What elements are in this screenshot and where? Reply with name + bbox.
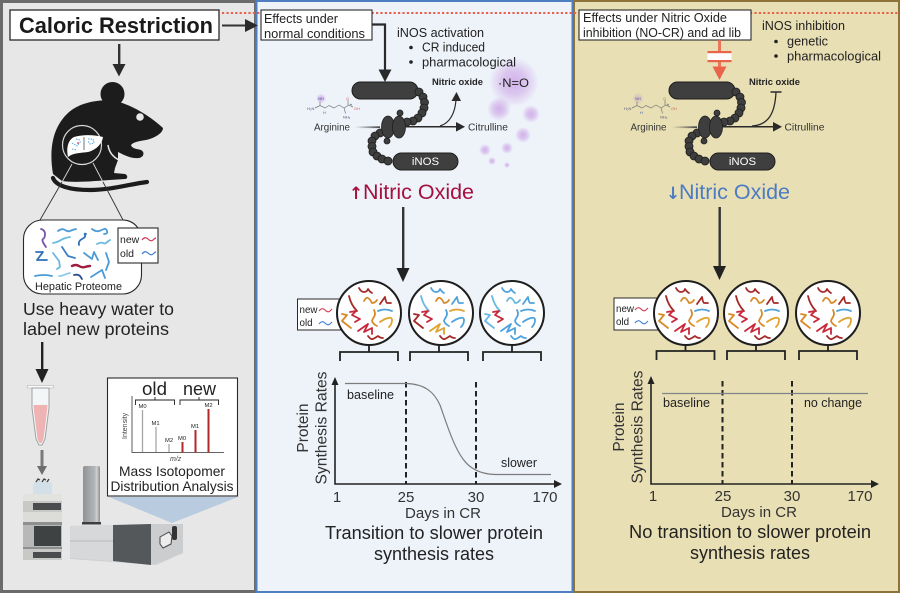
chart: protein synthesis no change: 170 [847, 488, 873, 505]
text: no transition caption: synthesis rates [690, 543, 810, 563]
icon: protein pool day 1 to 25 [337, 281, 401, 345]
arrow: label to tube [36, 342, 48, 383]
legend: new and old proteins: old [120, 248, 134, 260]
label box: effects under nitric oxide inhibition: inhibition (NO-CR) and ad lib [583, 25, 741, 40]
text: iNOS activation list [397, 25, 516, 70]
arrow: normal conditions to iNOS [372, 24, 392, 82]
divider: red dotted inhibition line [222, 12, 899, 14]
icon: liver [67, 135, 103, 157]
label box: effects under nitric oxide inhibition: Effects under Nitric Oxide [583, 10, 727, 25]
icon: iNOS enzyme normal [352, 82, 458, 170]
label box: effects under normal conditions: Effects under [264, 11, 339, 26]
chart: protein synthesis no change: baseline [663, 396, 710, 410]
icon: arginine molecule inhibited: OH [671, 106, 677, 111]
panel: effects under nitric oxide inhibition [574, 1, 899, 592]
legend: new and old proteins: new [120, 234, 140, 246]
text: iNOS inhibition list: genetic [787, 34, 829, 48]
text: transition caption: synthesis rates [374, 544, 494, 564]
arrow: blocked red arrow [708, 40, 732, 80]
arrow: citrulline and nitric oxide [405, 92, 465, 132]
chart: protein synthesis no change: Protein [611, 402, 628, 452]
text: no transition caption: No transition to slower protein [629, 522, 871, 542]
icon: arginine molecule inhibited [624, 92, 677, 120]
chart: protein synthesis transition: 30 [468, 489, 484, 506]
panel: mass isotopomer distribution analysis: M1 [152, 421, 160, 427]
chart: protein synthesis no change: 25 [715, 488, 731, 505]
chart: protein synthesis transition: Synthesis Rates [314, 371, 330, 484]
text: use heavy water: Use heavy water to [23, 299, 174, 319]
panel: mass isotopomer distribution analysis [108, 378, 238, 496]
icon: arginine molecule: H [323, 110, 326, 115]
panel: effects under normal conditions [256, 1, 572, 592]
icon: mouse with liver [51, 82, 163, 190]
text: transition caption [325, 523, 543, 564]
text: iNOS activation list: CR induced [422, 40, 485, 54]
chart: protein synthesis transition: baseline [347, 388, 394, 402]
text: citrulline: Citrulline [468, 122, 508, 134]
legend: new and old inhibited: old [616, 317, 629, 328]
arrow: nitric oxide to proteins [396, 207, 410, 282]
arrow: citrulline with inhibited nitric oxide [722, 92, 782, 132]
chart: protein synthesis transition: 25 [398, 489, 414, 506]
heading: increased nitric oxide: Nitric Oxide [363, 181, 474, 204]
title: Caloric Restriction: Caloric Restriction [19, 13, 213, 38]
icon: protein pool day 30 to 170 [480, 281, 544, 345]
text: arginine label inhibited: Arginine [630, 122, 667, 134]
text: transition caption: Transition to slower protein [325, 523, 543, 543]
label box: effects under nitric oxide inhibition [579, 10, 751, 40]
brackets: inhibited time windows [656, 345, 857, 360]
icon: arginine molecule: NH [318, 96, 324, 101]
icon: liquid chromatography stack [23, 479, 62, 560]
label box: effects under normal conditions [261, 10, 372, 41]
panel: mass isotopomer distribution analysis: M0 [178, 436, 186, 442]
panel: mass isotopomer distribution analysis: new [183, 378, 217, 399]
heading: increased nitric oxide: ↑ [349, 184, 363, 204]
icon: iNOS enzyme inhibited: iNOS [729, 156, 757, 168]
chart: protein synthesis no change: 30 [784, 488, 800, 505]
icon: iNOS enzyme inhibited [669, 82, 775, 170]
label box: effects under normal conditions: normal conditions [264, 26, 365, 41]
text: no transition caption [629, 522, 871, 563]
text: N=O formula: ·N=O [498, 76, 529, 90]
chart: purple nitric oxide glow [479, 57, 540, 168]
panel: caloric restriction workflow [2, 2, 256, 592]
panel: mass isotopomer distribution analysis: m/z [170, 456, 182, 463]
panel: mass isotopomer distribution analysis: Distribution Analysis [110, 478, 234, 494]
text: nitric oxide label: Nitric oxide [432, 77, 483, 87]
chart: protein synthesis no change: Days in CR [721, 504, 797, 521]
legend: new and old normal: old [300, 318, 313, 329]
callout: hepatic proteome zoom lines [40, 163, 123, 220]
legend: new and old normal: new [300, 305, 318, 316]
panel: hepatic proteome [24, 220, 142, 294]
chart: protein synthesis no change [611, 370, 879, 521]
icon: arginine molecule [307, 94, 360, 120]
text: iNOS inhibition list: pharmacological [787, 48, 881, 64]
icon: arginine molecule: NH₂ [343, 114, 351, 120]
brackets: normal time windows [340, 345, 541, 361]
icon: iNOS enzyme normal: iNOS [412, 156, 440, 168]
chart: protein synthesis transition: slower [501, 456, 537, 470]
icon: arginine molecule inhibited: NH [635, 96, 641, 101]
panel: mass isotopomer distribution analysis: M2 [204, 403, 213, 409]
heading: decreased nitric oxide: ↓ [666, 184, 680, 204]
panel: mass isotopomer distribution analysis: Mass Isotopomer [119, 463, 225, 479]
text: citrulline inhibited: Citrulline [784, 122, 825, 134]
chart: protein synthesis no change: no change [804, 396, 862, 410]
icon: arginine molecule inhibited: H₂N [624, 106, 631, 111]
chart: protein synthesis transition: Protein [295, 403, 312, 453]
panel: mass isotopomer distribution analysis: old [142, 378, 167, 399]
icon: protein pool day 25 to 30 [409, 281, 473, 345]
text: arginine label: Arginine [314, 122, 350, 134]
arrow: tube to instrument [37, 450, 47, 475]
chart: protein synthesis transition: Days in CR [405, 505, 481, 522]
legend: new and old inhibited: new [616, 304, 635, 315]
legend: new and old normal [298, 299, 340, 330]
arrow: restriction to mouse [112, 44, 126, 76]
icon: inhibited protein pool 3 [796, 281, 860, 345]
chart: protein synthesis transition: 170 [532, 489, 558, 506]
icon: sample tube [28, 386, 54, 445]
panel: mass isotopomer distribution analysis: M0 [138, 404, 147, 410]
chart: protein synthesis transition: 1 [333, 489, 341, 506]
legend: new and old inhibited [614, 298, 658, 330]
text: iNOS activation list: pharmacological [422, 54, 516, 70]
panel: mass isotopomer distribution analysis: Intensity [122, 412, 129, 439]
icon: arginine molecule: OH [354, 106, 360, 111]
text: nitric oxide label inhibited: Nitric oxide [749, 77, 800, 87]
icon: arginine molecule inhibited: O [663, 96, 666, 101]
text: iNOS activation list: iNOS activation [397, 25, 484, 40]
icon: arginine molecule: O [346, 96, 349, 101]
heading: decreased nitric oxide: Nitric Oxide [679, 181, 790, 204]
icon: inhibited protein pool 2 [724, 281, 788, 345]
callout: blue projection triangle [109, 497, 238, 523]
panel: mass isotopomer distribution analysis: M1 [191, 424, 199, 430]
arrow: restriction to normal panel [222, 19, 258, 32]
icon: mass spectrometer [70, 466, 183, 565]
chart: protein synthesis no change: Synthesis Rates [630, 370, 646, 484]
icon: arginine molecule inhibited: NH₂ [660, 114, 668, 120]
label: Hepatic Proteome: Hepatic Proteome [35, 281, 122, 293]
text: use heavy water [23, 299, 174, 339]
icon: arginine molecule inhibited: H [640, 110, 643, 115]
icon: inhibited protein pool 1 [654, 281, 718, 345]
panel: mass isotopomer distribution analysis: M2 [165, 438, 173, 444]
arrow: low nitric oxide to proteins [713, 207, 726, 280]
text: use heavy water: label new proteins [23, 319, 169, 339]
legend: new and old proteins [118, 228, 158, 263]
text: iNOS inhibition list [762, 18, 881, 64]
chart: protein synthesis no change: 1 [649, 488, 657, 505]
chart: protein synthesis transition [295, 371, 562, 522]
icon: arginine molecule: H₂N [307, 106, 314, 111]
text: iNOS inhibition list: iNOS inhibition [762, 18, 845, 33]
